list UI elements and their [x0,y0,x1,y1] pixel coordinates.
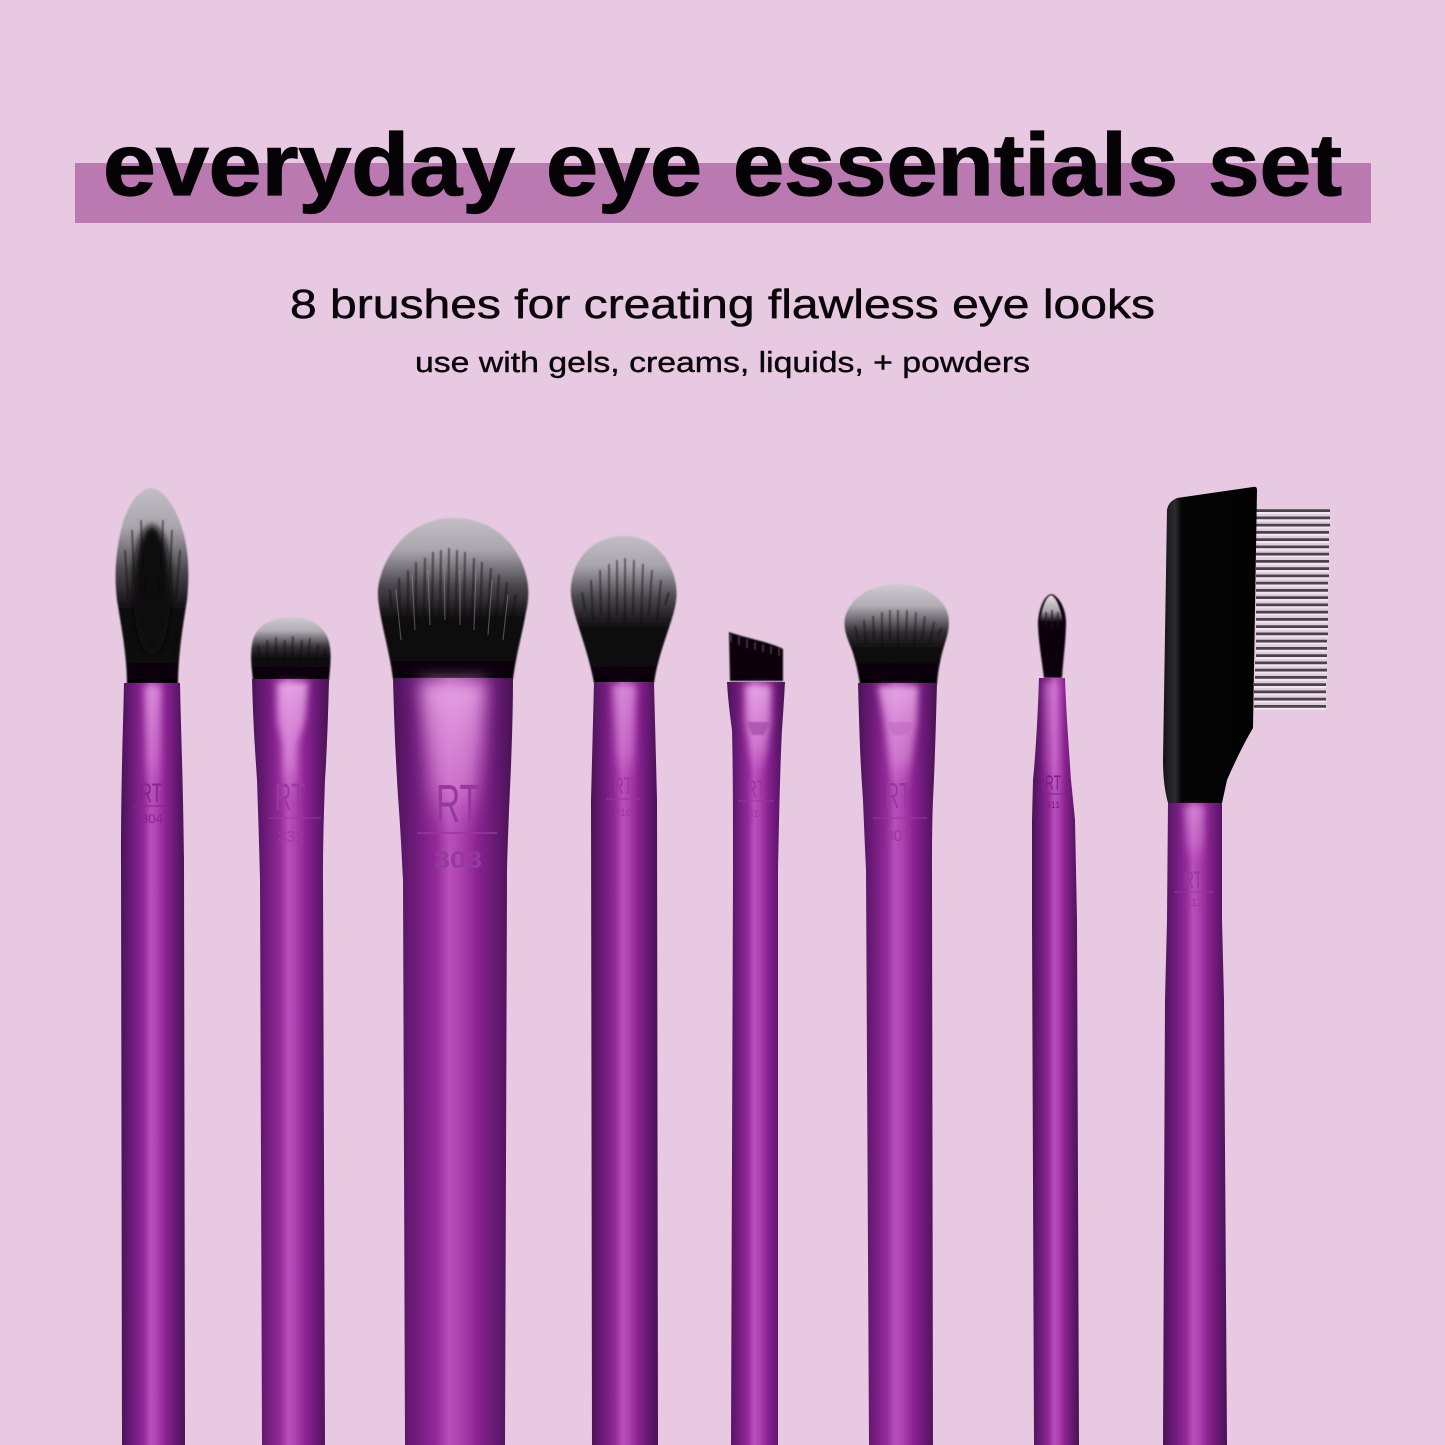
engraving: 332 [278,829,304,846]
engraving: RT [1045,772,1061,795]
subtitle: 8 brushes for creating flawless eye looks [290,281,1155,327]
ferrule highlight [1044,682,1060,800]
black comb body [1163,487,1257,803]
ferrule and handle [252,679,329,1445]
bristles [251,617,331,680]
ferrule highlight [144,686,161,790]
engraving: 310 [614,807,632,819]
engraving [1037,772,1071,810]
ferrule highlight [878,686,918,790]
ferrule highlight [420,681,486,830]
brush 5: angled liner brush 313 [727,632,785,1445]
brush 2: shader brush 332 [251,617,331,1445]
bristles [116,488,188,684]
ferrule shadow patch [885,722,916,735]
ferrule shadow patch [747,722,770,735]
engraving: 308 [434,847,482,874]
supporting line: use with gels, creams, liquids, + powders [415,347,1030,379]
ferrule highlight [612,685,636,780]
engraving [1174,867,1213,909]
brush 3: large shader brush 308 [378,518,528,1445]
engraving [132,778,171,826]
engraving [738,776,774,820]
engraving: RT [275,777,305,819]
brush 1: tapered blending brush 304 [116,488,188,1445]
engraving [417,774,497,874]
brush 6: medium shader brush 307 [845,584,949,1445]
bristles [571,536,677,683]
engraving: RT [885,775,911,816]
engraving: RT [614,773,633,800]
brush 8: lash and brow comb 312 [1163,487,1330,1445]
engraving: 312 [1185,897,1203,909]
ferrule highlight [277,682,308,800]
engraving [268,777,321,846]
engraving: RT [140,778,162,808]
bristles [729,632,783,681]
brush 7: detail smudge brush 311 [1032,594,1079,1445]
engraving: 307 [885,828,911,845]
brush 4: blending brush 310 [571,536,677,1445]
bristles [845,584,949,684]
engraving: RT [746,776,766,803]
ferrule and handle [393,678,513,1445]
ferrule and handle [727,682,785,1445]
engraving [606,773,640,819]
engraving: 304 [141,811,163,826]
title: eye [546,115,702,214]
bristles [378,518,528,679]
title: everyday [103,115,515,214]
title: set [1208,115,1342,214]
engraving: RT [1184,867,1203,894]
engraving: RT [436,774,480,834]
ferrule and handle [591,682,658,1445]
ferrule and handle [121,683,185,1445]
engraving: 313 [748,809,765,820]
handle highlight [1184,806,1204,860]
engraving [873,775,927,845]
metal comb teeth [1254,511,1330,709]
handle [1163,803,1227,1445]
bristles [1038,594,1066,678]
heading highlight band [75,163,1371,223]
brush lineup [116,487,1330,1445]
ferrule and handle [1032,678,1079,1445]
ferrule and handle [858,683,937,1445]
engraving: 311 [1046,800,1060,810]
title [103,115,1342,214]
title: essentials [733,115,1178,214]
ferrule highlight [745,685,771,775]
